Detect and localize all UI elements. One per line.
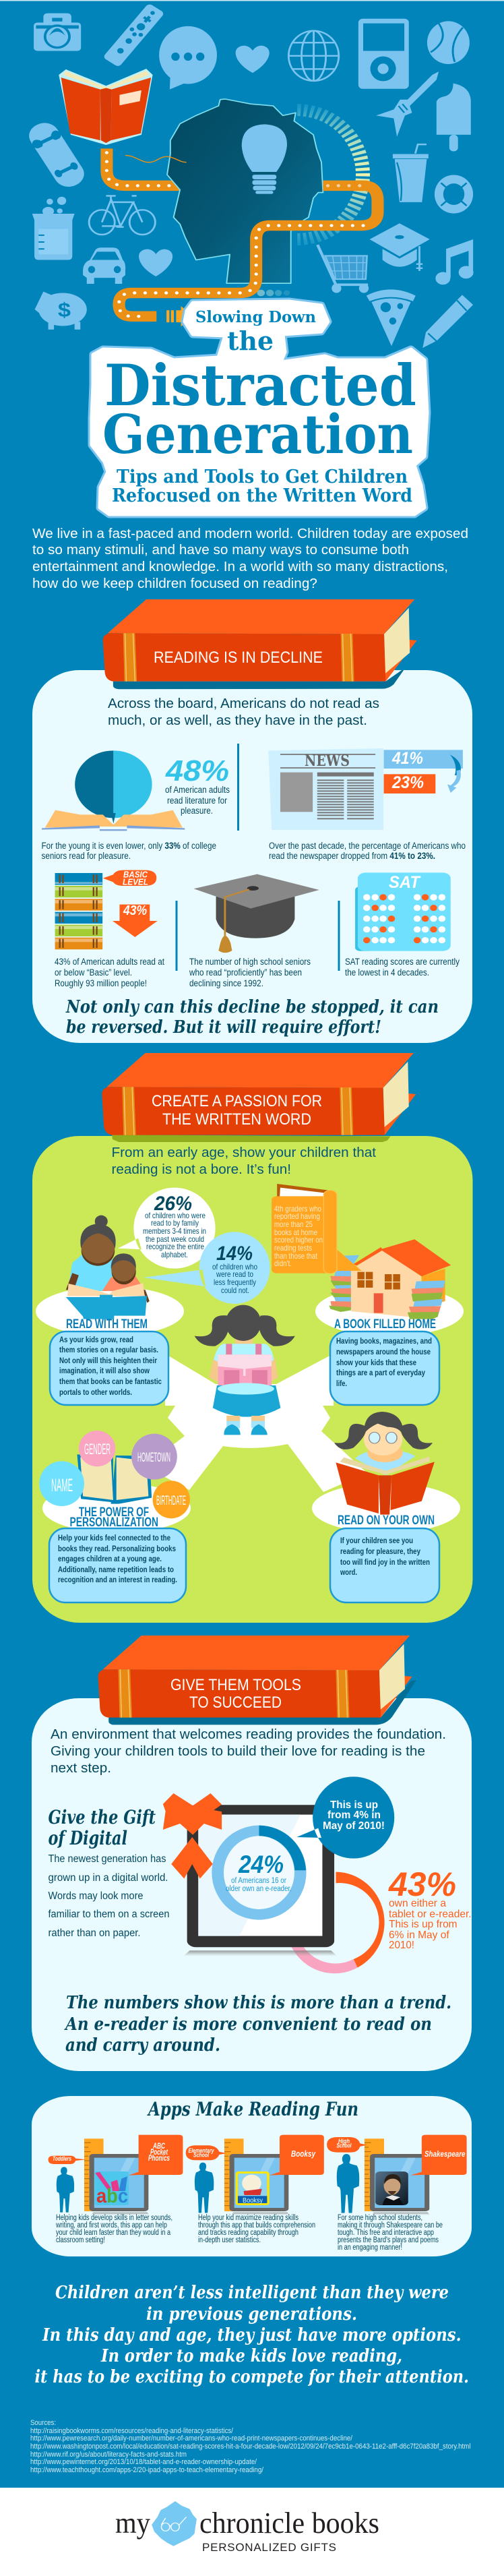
icon: stack of books with basic level arrow: BASIC xyxy=(123,870,148,880)
footer with logo xyxy=(0,2488,504,2576)
box: read with them xyxy=(50,1331,168,1405)
lead text: Across the board, Americans do not read as xyxy=(108,696,379,711)
bubble: 26% xyxy=(118,1188,216,1269)
lead text: much, or as well, as they have in the past. xyxy=(108,713,367,728)
lead text xyxy=(112,1145,376,1177)
app: booksy: School xyxy=(193,2152,209,2159)
stat: 43%: tablet or e-reader. xyxy=(389,1909,472,1920)
illustration: tablet with donut chart and ribbon: This is up xyxy=(330,1799,378,1811)
stat: 43%: own either a xyxy=(389,1898,446,1909)
stat: 48%: of American adults xyxy=(165,785,230,795)
icon: SAT answer sheet: SAT xyxy=(389,873,422,892)
box: a book filled home: Having books, magazines, and xyxy=(336,1338,432,1346)
heading: read on your own: READ ON YOUR OWN xyxy=(338,1514,435,1528)
text: college seniors xyxy=(42,841,216,861)
app: shakespeare: Shakespeare xyxy=(424,2149,466,2159)
box: read with them: them that books can be fantastic xyxy=(59,1378,162,1386)
app: abc pocket phonics xyxy=(49,2135,183,2244)
illustration: tablet with donut chart and ribbon: of Americans 16 or xyxy=(231,1877,286,1885)
illustration: personalization book and bubbles xyxy=(39,1431,190,1518)
app: shakespeare: presents the Bard's plays and poems xyxy=(338,2236,439,2244)
icon: SAT answer sheet xyxy=(355,872,451,951)
box: read with them: them stories on a regular basis. xyxy=(59,1346,158,1354)
closing message xyxy=(35,2283,469,2387)
app: abc pocket phonics: your child learn faster than they would in a xyxy=(56,2229,170,2237)
icon: camera xyxy=(34,13,81,51)
book heading xyxy=(98,1636,412,1718)
lead text: From an early age, show your children that xyxy=(112,1145,376,1160)
title: distracted: Distracted xyxy=(104,352,416,419)
app: shakespeare: High xyxy=(338,2138,350,2145)
book heading: TO SUCCEED xyxy=(189,1694,282,1712)
text: basic level: 43% of American adults read at xyxy=(55,957,164,967)
logo wordmark: my xyxy=(115,2507,150,2540)
panel: create a passion: BIRTHDATE xyxy=(156,1494,186,1508)
orange winding path xyxy=(119,185,377,316)
closing message: Children aren’t less intelligent than they were xyxy=(55,2283,449,2303)
text: proficiency: who read “proficiently” has been xyxy=(189,967,302,978)
icon: bicycle xyxy=(89,196,155,235)
text: college seniors: For the young it is even lower, only 33% of college xyxy=(42,841,216,851)
panel: create a passion xyxy=(32,1053,473,1623)
text: newspaper: Over the past decade, the percentage of Americans who xyxy=(269,841,466,851)
app: booksy: in-depth user statistics. xyxy=(198,2236,261,2244)
app: abc pocket phonics: Phonics xyxy=(148,2155,170,2163)
book heading xyxy=(103,599,417,682)
43% ring xyxy=(292,1872,385,1973)
app: shakespeare: in an engaging manner! xyxy=(338,2244,402,2252)
icon: game remote xyxy=(102,3,165,67)
closing statement: and carry around. xyxy=(65,2035,220,2056)
icon: piggy bank: $ xyxy=(58,299,71,321)
title: generation: Generation xyxy=(102,402,413,466)
text: digital world: The newest generation has xyxy=(49,1853,166,1865)
app: booksy: through this app that builds comprehension xyxy=(198,2221,315,2229)
app: abc pocket phonics: Pocket xyxy=(150,2149,168,2157)
app: abc pocket phonics: writing, and first words, this app can help xyxy=(55,2221,167,2229)
book shadow xyxy=(113,670,404,689)
text: digital world: grown up in a digital world. xyxy=(49,1872,168,1884)
stat: 43%: 43% xyxy=(388,1865,456,1903)
text: digital world: rather than on paper. xyxy=(49,1927,140,1939)
illustration: tablet with donut chart and ribbon xyxy=(163,1776,394,1973)
white hub and spokes xyxy=(36,1286,464,1533)
illustration: parent reading with child xyxy=(66,1216,150,1319)
text: digital world: Words may look more xyxy=(49,1890,143,1902)
heading: the power of personalization xyxy=(70,1505,158,1530)
icon: popsicle xyxy=(437,84,471,151)
box: a book filled home: newspapers around the house xyxy=(336,1348,431,1356)
box: personalization: Help your kids feel connected to the xyxy=(58,1534,170,1542)
box: a book filled home: things are a part of everyday xyxy=(336,1369,426,1377)
app: booksy: Help your kid maximize reading skills xyxy=(198,2214,298,2222)
stat: 43%: 6% in May of xyxy=(389,1929,449,1941)
callout: orange book 25 books at home xyxy=(272,1184,362,1274)
app: booksy: Elementary xyxy=(189,2147,214,2154)
orange path into the head xyxy=(106,148,180,185)
light bulb xyxy=(242,124,287,194)
heading: give the gift of digital xyxy=(49,1806,156,1849)
icon: globe xyxy=(288,31,339,81)
icon: open red book xyxy=(59,69,153,145)
closing statement xyxy=(63,1993,451,2056)
callout: orange book 25 books at home: than those that xyxy=(274,1251,318,1261)
stat: 43%: 2010! xyxy=(389,1940,414,1951)
heading: give the gift of digital: of Digital xyxy=(49,1827,127,1849)
arrow end xyxy=(166,306,195,326)
icon: shopping cart xyxy=(317,245,369,293)
intro text: to so many stimuli, and have so many ways to consume both xyxy=(32,543,409,558)
bubble: 14%: could not. xyxy=(221,1286,249,1295)
sources: http://www.pewinternet.org/2013/10/18/tablet-and-e-reader-ownership-update/ xyxy=(30,2458,257,2466)
app: shakespeare: making it through Shakespeare can be xyxy=(338,2221,443,2229)
subtitle xyxy=(112,467,412,506)
heading: give the gift of digital: Give the Gift xyxy=(49,1806,156,1828)
box: personalization: Additionally, name repetition leads to xyxy=(58,1566,174,1574)
ribbon xyxy=(163,1793,222,1879)
icon: newspaper with percent drop: 23% xyxy=(391,773,424,792)
box: read on your own: too will find joy in the written xyxy=(340,1559,430,1567)
sources: Sources: xyxy=(30,2419,56,2427)
bubble: 14%: less frequently xyxy=(214,1278,256,1287)
title: slowing down: Slowing Down xyxy=(195,308,316,326)
title: the: the xyxy=(227,326,274,356)
icon: ball xyxy=(427,21,470,64)
panel: apps make reading fun xyxy=(32,2096,472,2256)
icon: pencil xyxy=(422,295,473,348)
closing statement: An e-reader is more convenient to read on xyxy=(63,2014,432,2035)
icon: guitar xyxy=(376,71,439,137)
heading: Apps Make Reading Fun xyxy=(147,2098,358,2120)
box: read on your own: word. xyxy=(340,1569,357,1577)
book heading: THE WRITTEN WORD xyxy=(162,1110,311,1129)
box: read with them: imagination, it will also show xyxy=(59,1367,150,1375)
closing message: In order to make kids love reading, xyxy=(100,2346,402,2366)
book heading: GIVE THEM TOOLS xyxy=(170,1676,301,1694)
icon: piggy bank xyxy=(35,291,87,330)
panel: give them tools xyxy=(32,1636,472,2071)
box: read on your own xyxy=(330,1528,439,1602)
icon: skateboard xyxy=(24,119,89,191)
intro text: We live in a fast-paced and modern world. Children today are exposed xyxy=(32,527,468,541)
illustration: book filled home xyxy=(329,1239,451,1319)
icon: stack of books with basic level arrow xyxy=(55,870,158,949)
closing statement: Not only can this decline be stopped, it can xyxy=(65,997,439,1017)
bubble: 14%: were read to xyxy=(216,1269,253,1279)
text: newspaper xyxy=(269,841,466,861)
heading: the power of personalization: THE POWER OF xyxy=(79,1505,149,1520)
icon: pizza slice xyxy=(367,289,416,346)
text: SAT: SAT reading scores are currently xyxy=(345,957,460,967)
stat: 48%: read literature for xyxy=(167,796,227,806)
faded trail xyxy=(257,290,290,296)
closing message: in previous generations. xyxy=(146,2304,357,2325)
logo splash and glasses xyxy=(152,2501,197,2546)
illustration: tablet with donut chart and ribbon: 24% xyxy=(238,1851,284,1878)
lead text: Giving your children tools to build their love for reading is the xyxy=(51,1744,425,1759)
bubble: 14% xyxy=(144,1232,270,1304)
illustration: personalization book and bubbles: NAME xyxy=(51,1475,73,1495)
bubble: 26%: read to by family xyxy=(151,1218,199,1228)
app: shakespeare xyxy=(327,2135,467,2252)
lead text: An environment that welcomes reading provides the foundation. xyxy=(51,1727,446,1742)
text: proficiency: declining since 1992. xyxy=(189,978,263,988)
text: basic level: Roughly 93 million people! xyxy=(55,978,147,988)
radiating arc xyxy=(297,110,363,239)
app: abc pocket phonics: Helping kids develop skills in letter sounds, xyxy=(56,2214,172,2222)
app: abc pocket phonics: ABC xyxy=(152,2143,165,2151)
bubble: 26%: members 3-4 times in xyxy=(143,1226,206,1236)
callout: orange book 25 books at home: reported having xyxy=(274,1211,320,1221)
intro text: entertainment and knowledge. In a world with so many distractions, xyxy=(32,560,448,574)
book heading xyxy=(102,1053,416,1135)
book shadow xyxy=(108,1681,416,1725)
bubble: 14%: 14% xyxy=(216,1242,253,1265)
icon: heart small xyxy=(139,249,172,276)
icon: beaker xyxy=(32,197,75,260)
sources xyxy=(30,2419,470,2474)
stat: 48%: 48% xyxy=(165,754,229,787)
lead text xyxy=(108,696,379,728)
bubble: 26%: alphabet. xyxy=(161,1250,188,1259)
stat: 48% xyxy=(165,754,230,816)
box: a book filled home xyxy=(330,1331,439,1405)
lead text: reading is not a bore. It’s fun! xyxy=(112,1162,291,1177)
app: abc pocket phonics: Toddlers xyxy=(53,2155,71,2162)
app: abc pocket phonics: abc xyxy=(96,2185,128,2207)
pie chart on open book xyxy=(42,750,185,831)
text: basic level: or below “Basic” level. xyxy=(55,967,132,978)
bubble: 14%: of children who xyxy=(212,1262,257,1271)
callout: orange book 25 books at home: 4th graders who xyxy=(274,1204,321,1214)
box: personalization xyxy=(49,1528,186,1602)
stat: 43% xyxy=(388,1865,472,1951)
app: booksy: Booksy xyxy=(291,2149,316,2159)
intro text xyxy=(32,527,468,591)
closing statement xyxy=(65,997,439,1038)
bubble: 26%: the past week could xyxy=(146,1234,204,1244)
heading: the power of personalization: PERSONALIZATION xyxy=(70,1516,158,1530)
box: a book filled home: show your kids that these xyxy=(336,1359,416,1367)
icon: heart xyxy=(236,46,270,73)
text: SAT: the lowest in 4 decades. xyxy=(345,967,429,978)
heading: read with them: READ WITH THEM xyxy=(66,1317,148,1331)
path dots xyxy=(106,152,363,316)
sources: http://www.rif.org/us/about/literacy-facts-and-stats.htm xyxy=(30,2451,187,2459)
icon: graduation cap xyxy=(194,874,319,953)
stat: 43%: This is up from xyxy=(389,1919,458,1930)
heading: a book filled home: A BOOK FILLED HOME xyxy=(334,1317,436,1331)
box: read with them: As your kids grow, read xyxy=(59,1336,133,1344)
app: booksy: and tracks reading capability through xyxy=(198,2229,298,2237)
box: a book filled home: life. xyxy=(336,1380,347,1388)
logo wordmark: chronicle books xyxy=(199,2507,379,2540)
icon: graduation cap xyxy=(370,223,430,271)
book heading: CREATE A PASSION FOR xyxy=(152,1092,322,1110)
callout: orange book 25 books at home: more than 25 xyxy=(274,1220,313,1229)
lead text xyxy=(51,1727,446,1776)
illustration: personalization book and bubbles: HOMETOWN xyxy=(137,1451,170,1465)
icon: speech bubble xyxy=(159,26,217,90)
closing statement: be reversed. But it will require effort! xyxy=(66,1017,381,1038)
intro text: how do we keep children focused on reading? xyxy=(32,576,317,591)
text: proficiency: The number of high school seniors xyxy=(189,957,311,967)
panel: reading is in decline xyxy=(32,599,472,1043)
icon: life ring xyxy=(435,175,473,214)
sources: http://www.teachthought.com/apps-2/20-ipad-apps-to-teach-elementary-reading/ xyxy=(30,2466,264,2474)
app: booksy xyxy=(186,2135,324,2244)
book shadow xyxy=(112,1135,391,1142)
lead text: next step. xyxy=(51,1761,111,1776)
book heading: READING IS IN DECLINE xyxy=(154,649,323,667)
text: SAT xyxy=(345,957,460,978)
subtitle: Refocused on the Written Word xyxy=(112,485,412,506)
illustration: tablet with donut chart and ribbon: May of 2010! xyxy=(323,1820,385,1832)
box: personalization: recognition and an interest in reading. xyxy=(58,1576,177,1584)
bubble: 26%: 26% xyxy=(154,1193,192,1215)
text: college seniors: seniors read for pleasure. xyxy=(42,851,131,861)
icon: drink cup xyxy=(393,144,429,202)
illustration: girl reading with red book xyxy=(334,1412,435,1515)
app: abc pocket phonics: classroom setting! xyxy=(56,2236,105,2244)
bubble: 26%: of children who were xyxy=(145,1211,206,1220)
text: digital world xyxy=(49,1853,170,1939)
stat: 48%: pleasure. xyxy=(181,806,213,816)
callout: orange book 25 books at home: reading tests xyxy=(274,1243,312,1253)
box: read on your own: reading for pleasure, they xyxy=(340,1548,420,1556)
header illustration: distraction icons xyxy=(24,3,474,348)
illustration: personalization book and bubbles: GENDER xyxy=(84,1441,111,1458)
icon: newspaper with percent drop: NEWS xyxy=(305,752,350,770)
sources: http://raisingbookworms.com/resources/reading-and-literacy-statistics/ xyxy=(30,2427,234,2435)
callout: orange book 25 books at home: books at home xyxy=(274,1228,317,1237)
callout: orange book 25 books at home: scored higher on xyxy=(274,1235,323,1245)
logo wordmark: PERSONALIZED GIFTS xyxy=(202,2541,336,2554)
app: shakespeare: School xyxy=(337,2143,352,2149)
app: shakespeare: tough. This free and interactive app xyxy=(338,2229,434,2237)
callout: orange book 25 books at home: didn't. xyxy=(274,1259,292,1268)
text: basic level xyxy=(55,957,164,988)
icon: newspaper with percent drop: 41% xyxy=(391,749,423,768)
bubble: 26%: recognize the entire xyxy=(146,1242,204,1251)
icon: stack of books with basic level arrow: LEVEL xyxy=(123,877,148,887)
header illustration: head, book and reading path xyxy=(59,69,377,326)
box: read with them: Not only will this heighten their xyxy=(59,1357,157,1365)
icon: stack of books with basic level arrow: 43% xyxy=(123,903,147,918)
head silhouette xyxy=(167,99,323,283)
box: read with them: portals to other worlds. xyxy=(59,1389,132,1397)
illustration: girl from behind xyxy=(195,1305,295,1435)
icon: music note xyxy=(435,239,474,284)
text: newspaper: read the newspaper dropped from 41% to 23%. xyxy=(269,851,435,861)
logo wordmark xyxy=(115,2507,379,2554)
icon: music player xyxy=(358,19,409,89)
app: shakespeare: For some high school students, xyxy=(338,2214,422,2222)
title block xyxy=(92,301,427,514)
text: proficiency xyxy=(189,957,311,988)
icon: car xyxy=(83,247,125,284)
box: read on your own: If your children see you xyxy=(340,1537,413,1545)
subtitle: Tips and Tools to Get Children xyxy=(117,467,408,487)
text: digital world: familiar to them on a screen xyxy=(49,1909,170,1920)
icon: newspaper with percent drop xyxy=(268,748,463,830)
illustration: tablet with donut chart and ribbon: older own an e-reader. xyxy=(226,1885,292,1893)
closing statement: The numbers show this is more than a trend. xyxy=(66,1993,451,2013)
title cloud xyxy=(92,301,427,514)
box: personalization: engages children at a young age. xyxy=(58,1555,162,1563)
sources: http://www.pewresearch.org/daily-number/number-of-americans-who-read-print-newspapers-continues-decline/ xyxy=(30,2434,353,2443)
box: personalization: books they read. Personalizing books xyxy=(58,1545,176,1553)
bubble xyxy=(296,1776,394,1859)
squiggle xyxy=(125,156,187,162)
app: booksy: Booksy xyxy=(243,2197,263,2205)
illustration: tablet with donut chart and ribbon: from 4% in xyxy=(327,1809,381,1821)
